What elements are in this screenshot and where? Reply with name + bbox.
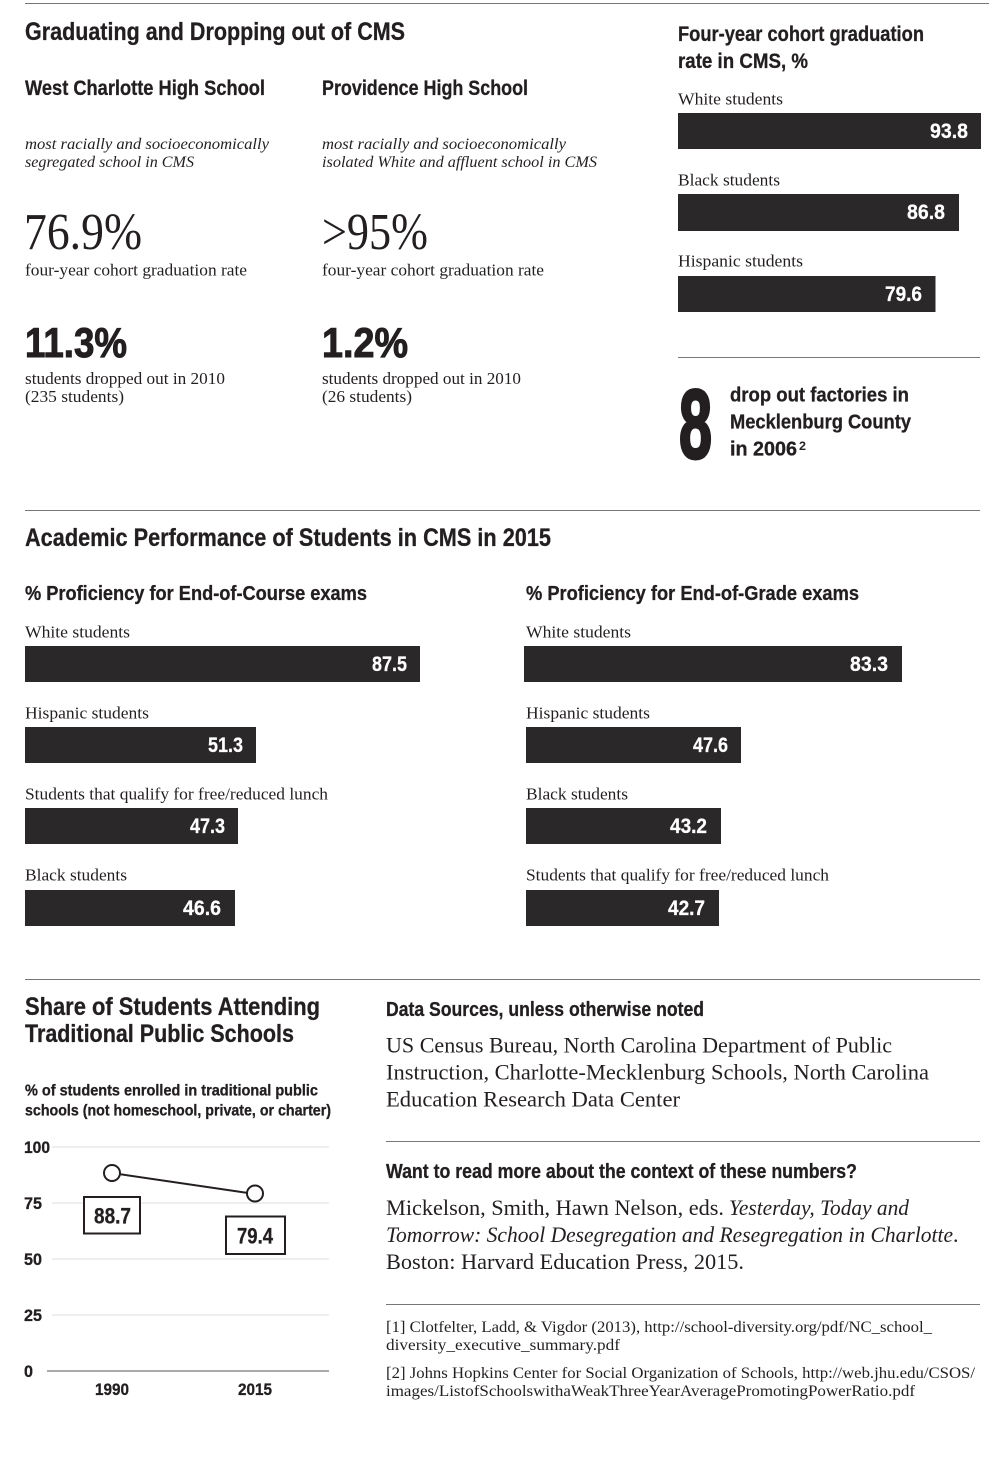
y axis labels: 75 — [24, 1194, 42, 1213]
bar: Hispanic students 79.6: Hispanic students — [678, 252, 803, 270]
column: West Charlotte High School: four-year cohort graduation rate — [25, 260, 247, 280]
heading: share of students: Share of Students Attending — [25, 993, 320, 1021]
x axis labels: 2015 — [238, 1380, 272, 1399]
bar: free/reduced lunch 42.7: 42.7 — [668, 897, 705, 920]
panel: graduating and dropping out — [24, 18, 597, 406]
x axis labels — [95, 1380, 272, 1399]
text block: further reading: Boston: Harvard Education Press, 2015. — [386, 1249, 744, 1274]
chart: End-of-Course proficiency — [25, 583, 420, 926]
line chart — [24, 1138, 329, 1399]
text block: data sources: US Census Bureau, North Carolina Department of Public — [386, 1032, 892, 1058]
bar: free/reduced lunch 47.3: 47.3 — [190, 815, 225, 838]
bar: White students 87.5: White students — [25, 622, 130, 642]
text block: footnotes: [1] Clotfelter, Ladd, & Vigdor (2013), http://school-diversity.org/pdf/NC_school_ — [386, 1319, 933, 1336]
callout: 8 drop out factories: in 2006 — [730, 438, 797, 460]
column: Providence High School — [322, 77, 597, 406]
column: West Charlotte High School: most racially and socioeconomically — [25, 136, 270, 153]
callout: 8 drop out factories: 2 — [799, 439, 806, 453]
panel: four-year cohort graduation rate: rate in CMS, % — [678, 50, 808, 73]
bar: Hispanic students 47.6 — [526, 704, 741, 763]
chart: End-of-Course proficiency: % Proficiency for End-of-Course exams — [25, 583, 367, 605]
y axis labels — [24, 1138, 50, 1381]
text block: footnotes: [2] Johns Hopkins Center for Social Organization of Schools, http://web.jhu.edu/CSOS/ — [386, 1365, 976, 1382]
heading: four-year cohort graduation rate: Four-year cohort graduation — [678, 23, 924, 46]
text block: further reading: Tomorrow: School Desegregation and Resegregation in Charlotte — [386, 1222, 953, 1247]
column: West Charlotte High School: West Charlotte High School — [25, 77, 265, 100]
text block: further reading: . — [953, 1222, 958, 1247]
column: Providence High School: Providence High School — [322, 77, 528, 100]
panel: share of students in traditional public schools — [24, 993, 331, 1399]
bar: Black students 86.8: 86.8 — [907, 201, 945, 224]
bar: Hispanic students 47.6: Hispanic students — [526, 704, 650, 722]
heading: graduating and dropping out of CMS: Graduating and Dropping out of CMS — [25, 18, 405, 46]
callout: 8 drop out factories: drop out factories in — [730, 384, 909, 406]
y axis labels: 100 — [24, 1138, 50, 1157]
text block: further reading: Want to read more about the context of these numbers? — [386, 1161, 857, 1183]
column: Providence High School: four-year cohort graduation rate — [322, 260, 544, 280]
text block: footnotes — [386, 1319, 976, 1400]
text block: further reading — [386, 1161, 958, 1274]
column: West Charlotte High School: 11.3% — [25, 319, 127, 366]
bar: Black students 43.2: Black students — [526, 784, 628, 804]
bar: free/reduced lunch 42.7: Students that qualify for free/reduced lunch — [526, 866, 830, 884]
bar: Hispanic students 51.3: 51.3 — [208, 734, 243, 757]
bar: Black students 46.6: Black students — [25, 866, 127, 884]
data line — [104, 1165, 263, 1202]
text block: further reading: Mickelson, Smith, Hawn Nelson, eds. — [386, 1195, 724, 1220]
text block: footnotes: diversity_executive_summary.pdf — [386, 1337, 621, 1354]
column: West Charlotte High School: segregated school in CMS — [25, 154, 194, 171]
bar: Black students 86.8 — [678, 170, 959, 231]
bar: Hispanic students 51.3: Hispanic students — [25, 704, 149, 722]
value box: 88.7 — [84, 1197, 140, 1234]
text block: further reading: Yesterday, Today and — [729, 1195, 910, 1220]
bar: Hispanic students 47.6: 47.6 — [693, 734, 728, 757]
column: West Charlotte High School: (235 students) — [25, 387, 124, 406]
callout: 8 drop out factories — [679, 369, 912, 479]
column: Providence High School: most racially and socioeconomically — [322, 136, 567, 153]
value box: 88.7: 88.7 — [94, 1204, 131, 1228]
callout: 8 drop out factories: Mecklenburg County — [730, 412, 912, 434]
y axis labels: 25 — [24, 1306, 42, 1325]
bar: free/reduced lunch 47.3 — [25, 784, 329, 844]
bar: Black students 86.8: Black students — [678, 170, 780, 190]
bar: White students 83.3: 83.3 — [850, 653, 888, 676]
bar: White students 83.3: White students — [526, 622, 631, 642]
heading: share of students — [25, 993, 320, 1048]
panel: academic performance — [25, 524, 902, 926]
x axis labels: 1990 — [95, 1380, 129, 1399]
bar: White students 87.5 — [25, 622, 420, 682]
heading: share of students: Traditional Public Schools — [25, 1020, 294, 1048]
column: West Charlotte High School — [24, 77, 270, 406]
bar: White students 93.8: 93.8 — [930, 120, 968, 143]
chart subtitle: % of students enrolled in traditional public — [25, 1082, 318, 1100]
column: Providence High School: >95% — [322, 204, 428, 261]
panel: four-year cohort graduation rate — [678, 23, 981, 312]
bar: Black students 46.6 — [25, 866, 235, 926]
y axis labels: 0 — [24, 1362, 33, 1381]
bar: Hispanic students 79.6 — [678, 252, 936, 312]
chart subtitle — [25, 1082, 331, 1120]
text block: data sources: Education Research Data Center — [386, 1086, 681, 1112]
bar: free/reduced lunch 47.3: Students that qualify for free/reduced lunch — [25, 784, 329, 804]
bar: Black students 43.2: 43.2 — [670, 815, 707, 838]
text block: data sources: Data Sources, unless otherwise noted — [386, 999, 704, 1021]
bar: free/reduced lunch 42.7 — [526, 866, 830, 926]
bar: White students 87.5: 87.5 — [372, 653, 407, 676]
text block: data sources — [386, 999, 929, 1112]
y axis labels: 50 — [24, 1250, 42, 1269]
chart subtitle: schools (not homeschool, private, or charter) — [25, 1102, 331, 1120]
column: Providence High School: 1.2% — [322, 319, 408, 366]
text block: footnotes: images/ListofSchoolswithaWeakThreeYearAveragePromotingPowerRatio.pdf — [386, 1383, 916, 1400]
column: West Charlotte High School: students dropped out in 2010 — [25, 369, 225, 388]
bar: White students 93.8 — [678, 90, 981, 149]
heading: academic performance: Academic Performance of Students in CMS in 2015 — [25, 524, 551, 552]
column: West Charlotte High School: 76.9% — [24, 204, 142, 261]
bar: Black students 46.6: 46.6 — [183, 897, 221, 920]
column: Providence High School: (26 students) — [322, 387, 412, 406]
column: Providence High School: students dropped out in 2010 — [322, 369, 521, 388]
bar: Hispanic students 51.3 — [25, 704, 256, 763]
callout: 8 drop out factories: 8 — [679, 369, 712, 479]
text block: data sources: Instruction, Charlotte-Mecklenburg Schools, North Carolina — [386, 1060, 929, 1084]
value box: 79.4 — [226, 1216, 285, 1254]
bar: Black students 43.2 — [526, 784, 721, 844]
chart: End-of-Grade proficiency: % Proficiency for End-of-Grade exams — [526, 583, 859, 605]
value box: 79.4: 79.4 — [237, 1224, 274, 1248]
bar: White students 83.3 — [524, 622, 902, 682]
chart: End-of-Grade proficiency — [524, 583, 902, 926]
bar: Hispanic students 79.6: 79.6 — [885, 283, 922, 306]
bar: White students 93.8: White students — [678, 90, 783, 108]
column: Providence High School: isolated White and affluent school in CMS — [322, 154, 597, 171]
